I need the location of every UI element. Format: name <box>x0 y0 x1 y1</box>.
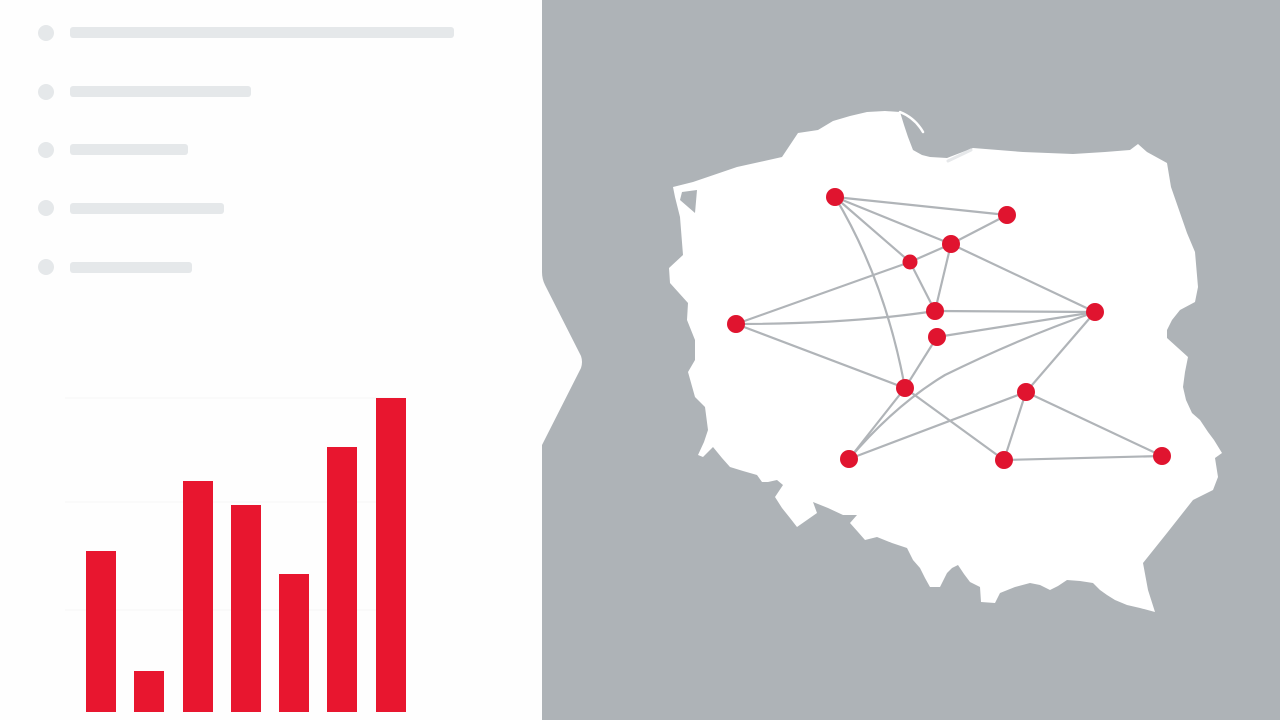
network nodes <box>727 188 1171 469</box>
Vistula spit <box>948 150 971 161</box>
list row 1 <box>38 25 454 41</box>
Hel peninsula <box>900 112 923 132</box>
panel: grey map background with chevron <box>542 0 1280 720</box>
list placeholder <box>38 25 454 275</box>
map of Poland <box>669 111 1222 612</box>
list row 3 <box>38 142 188 158</box>
bar chart <box>65 398 406 712</box>
list row 5 <box>38 259 192 275</box>
Stettin lagoon <box>680 190 697 213</box>
network links <box>736 197 1162 460</box>
list row 4 <box>38 200 224 216</box>
list row 2 <box>38 84 251 100</box>
